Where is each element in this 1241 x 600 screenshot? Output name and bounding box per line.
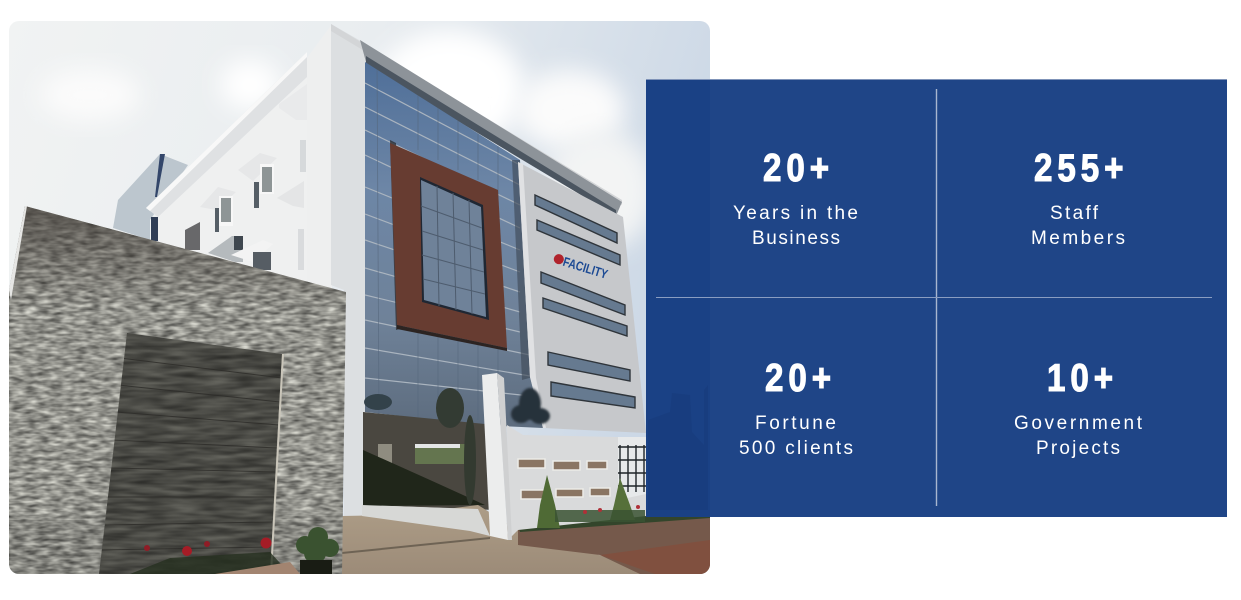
tree behind wall	[511, 388, 550, 424]
stat: government projects: Government	[1014, 413, 1143, 434]
red flowers and plant	[130, 527, 339, 574]
grey facade with window strips	[518, 162, 646, 433]
black gate	[618, 445, 646, 492]
brown window frame	[390, 143, 507, 351]
sky with clouds	[9, 21, 710, 574]
stat: fortune 500 clients: 20+	[765, 355, 836, 400]
stone boundary wall	[0, 200, 350, 580]
stat: years in business	[733, 145, 858, 249]
stat: years in business: Years in the	[733, 203, 858, 224]
panel overlap on photo	[646, 79, 710, 517]
stat: government projects: 10+	[1047, 355, 1118, 400]
building photograph	[0, 21, 710, 580]
windows and awnings	[185, 153, 277, 270]
ground floor undercroft	[363, 388, 495, 510]
stat: fortune 500 clients	[739, 355, 853, 459]
stat: staff members: 255+	[1034, 145, 1128, 190]
stat: staff members: Staff	[1050, 203, 1099, 224]
distant building	[113, 154, 188, 241]
stat: government projects: Projects	[1036, 438, 1120, 459]
shrubs	[537, 475, 645, 528]
stat: staff members	[1031, 145, 1128, 249]
white boundary wall	[482, 373, 646, 540]
stat: years in business: 20+	[763, 145, 834, 190]
stat: years in business: Business	[752, 228, 840, 249]
glass curtain wall	[365, 60, 543, 428]
white building wing	[146, 52, 307, 270]
eFacility sign	[554, 254, 608, 278]
eFacility sign: FACILITY	[561, 254, 610, 282]
dark stone inset	[95, 330, 285, 575]
paved driveway	[342, 505, 710, 574]
stat: staff members: Members	[1031, 228, 1125, 249]
stat: fortune 500 clients: 500 clients	[739, 438, 853, 459]
stats panel	[646, 79, 1227, 517]
stat: government projects	[1014, 355, 1143, 459]
stat: fortune 500 clients: Fortune	[755, 413, 836, 434]
corner tower	[307, 24, 622, 520]
